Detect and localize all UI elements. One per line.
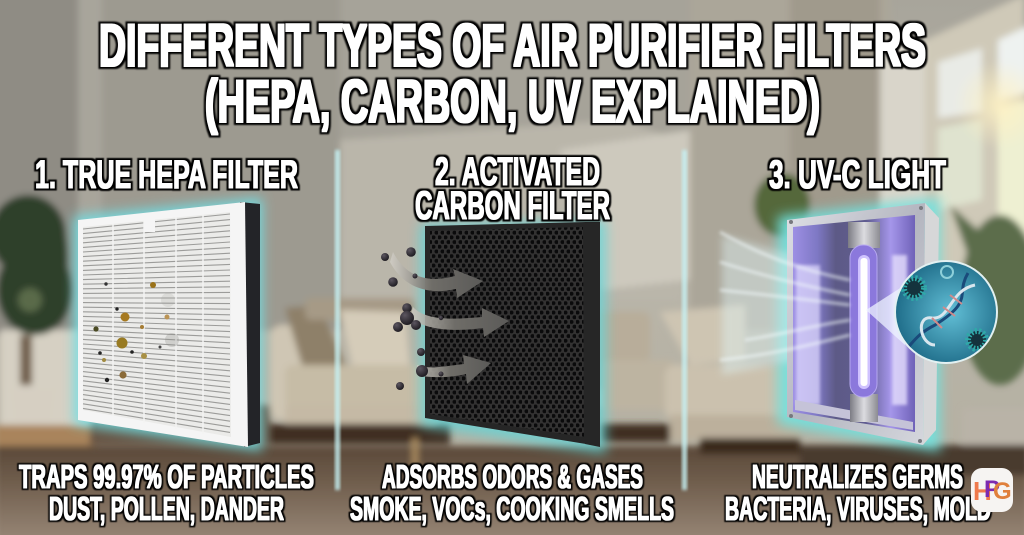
caption: carbon: SMOKE, VOCs, COOKING SMELLS: [350, 490, 674, 527]
label: 2. Activated Carbon Filter: 2. ACTIVATED: [435, 150, 600, 194]
gas molecules: [381, 247, 444, 390]
title: [99, 12, 926, 135]
light cone: [866, 285, 905, 345]
lamp base: [850, 394, 878, 422]
caption: UV-C: [725, 458, 991, 527]
panel: Activated carbon filter: [381, 220, 606, 454]
logo badge: [971, 468, 1013, 512]
caption: HEPA: DUST, POLLEN, DANDER: [49, 490, 284, 527]
left wall: [0, 0, 80, 335]
panel: UV-C light: [720, 198, 998, 452]
magnified germs and DNA circle: [894, 260, 998, 364]
logo badge: P: [984, 476, 1000, 503]
sofa left: [270, 325, 320, 420]
sofa right: [590, 312, 650, 362]
illustration: HEPA filter: [78, 202, 260, 447]
arrows: airflow: [390, 252, 509, 384]
rivets: [789, 206, 923, 443]
caption: carbon: [350, 458, 674, 527]
light divider left: [335, 150, 340, 490]
right wall: [690, 0, 890, 330]
side table: [0, 425, 95, 447]
panel: True HEPA filter: [74, 198, 262, 451]
right plant: [950, 205, 1024, 385]
label: 2. Activated Carbon Filter: CARBON FILTER: [415, 184, 610, 228]
glow: HEPA: [74, 198, 262, 451]
trapped particles: [93, 282, 179, 382]
glow: UV: [778, 198, 940, 452]
lamp cap top: [848, 222, 880, 248]
window panes: [938, 48, 982, 118]
light divider right: [682, 150, 687, 490]
floor: [0, 446, 1024, 535]
illustration: carbon filter: [425, 222, 600, 447]
caption: HEPA: [19, 458, 314, 527]
caption: HEPA: TRAPS 99.97% OF PARTICLES: [19, 458, 314, 495]
plant behind UV unit: [754, 173, 810, 237]
left pot: [10, 388, 56, 425]
caption: carbon: ADSORBS ODORS & GASES: [382, 458, 643, 495]
glow: carbon: [420, 220, 606, 454]
left plant: [0, 195, 73, 335]
label: 2. Activated Carbon Filter: [415, 150, 610, 228]
coffee table: [570, 389, 630, 407]
airflow glow: [722, 235, 850, 375]
logo badge: G: [993, 478, 1012, 505]
logo badge: H: [973, 476, 992, 506]
airflow streaks: [720, 232, 850, 360]
lamp tube: [850, 245, 877, 397]
label: 1. True HEPA Filter: 1. TRUE HEPA FILTER: [35, 153, 298, 197]
illustration: UV-C unit: [787, 203, 939, 445]
